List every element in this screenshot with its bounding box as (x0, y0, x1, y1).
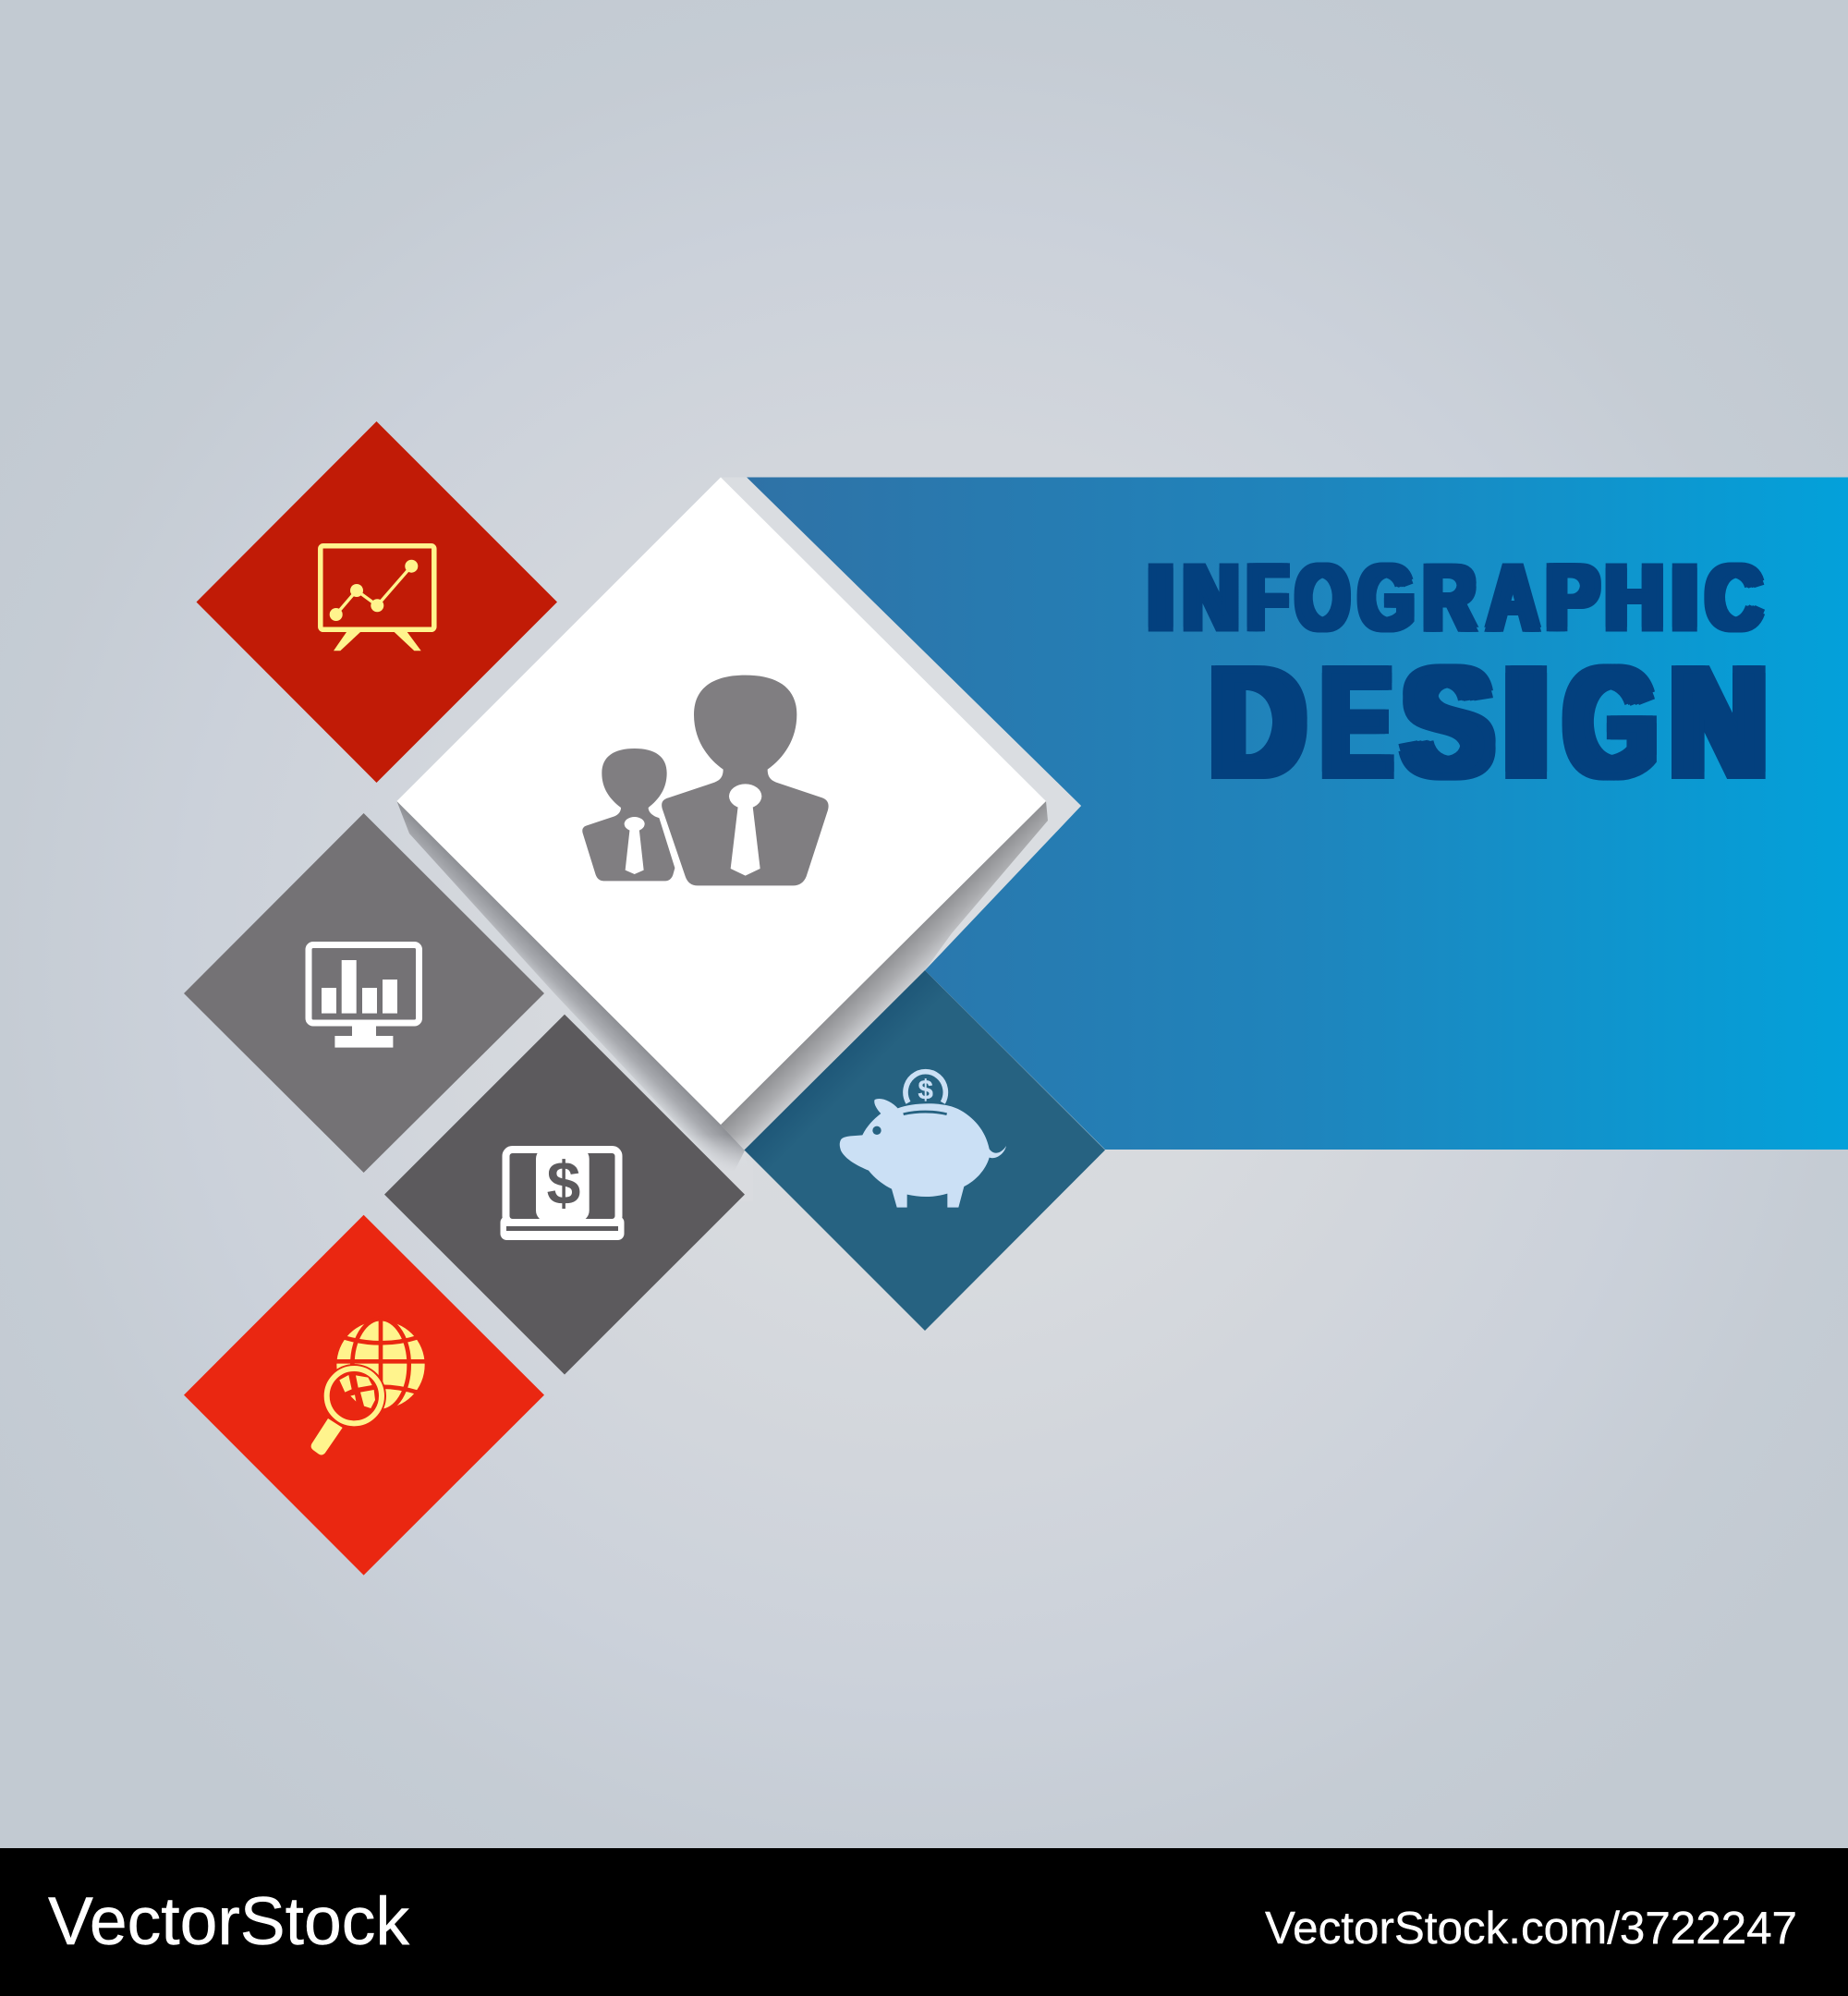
footer brand: VectorStock (48, 1884, 409, 1959)
title text: C (1706, 546, 1762, 650)
panel: dark gray money diamond (384, 1015, 745, 1375)
title text: F (1246, 546, 1288, 650)
icon: two business people (582, 675, 829, 885)
shadow: lower-left of white diamond (397, 801, 745, 1180)
title text: I (1671, 546, 1697, 650)
icon: globe with magnifying glass (311, 1319, 428, 1455)
shadow fade below white diamond (688, 1125, 753, 1201)
panel: bright red globe diamond (184, 1215, 544, 1576)
title text: H (1605, 546, 1664, 650)
title text: N (1183, 546, 1239, 650)
title text: I (1148, 546, 1174, 650)
footer bar (0, 1848, 1848, 1996)
shadow: lower-right of white diamond (721, 801, 1048, 1150)
title text: S (1403, 637, 1493, 809)
title text: R (1423, 546, 1476, 650)
title text: P (1546, 546, 1599, 650)
title text: G (1358, 546, 1415, 650)
title text: O (1295, 546, 1350, 650)
title text: G (1563, 637, 1657, 809)
back plate behind white diamond (396, 477, 1081, 1201)
icon: piggy bank with coin: $ (918, 1076, 933, 1106)
icon: banknote stack with dollar sign (501, 1148, 625, 1240)
panel: gray monitor diamond (184, 813, 544, 1173)
icon: monitor with bar chart (309, 944, 419, 1048)
icon: banknote stack with dollar sign: $ (547, 1149, 580, 1217)
title text: I (1504, 637, 1548, 809)
title text: N (1671, 637, 1767, 809)
title text: A (1487, 546, 1539, 650)
panel: teal piggy bank diamond (745, 970, 1105, 1331)
title text: D (1210, 637, 1305, 809)
icon: piggy bank with coin (840, 1072, 1006, 1208)
icon: presentation board with line chart (321, 546, 434, 651)
footer image id: VectorStock.com/3722247 (1265, 1904, 1797, 1953)
blue banner (747, 477, 1848, 1150)
panel: dark red chart diamond (196, 421, 557, 783)
title text: E (1321, 637, 1392, 809)
panel: white central diamond (397, 477, 1046, 1125)
title text (1148, 546, 1767, 809)
